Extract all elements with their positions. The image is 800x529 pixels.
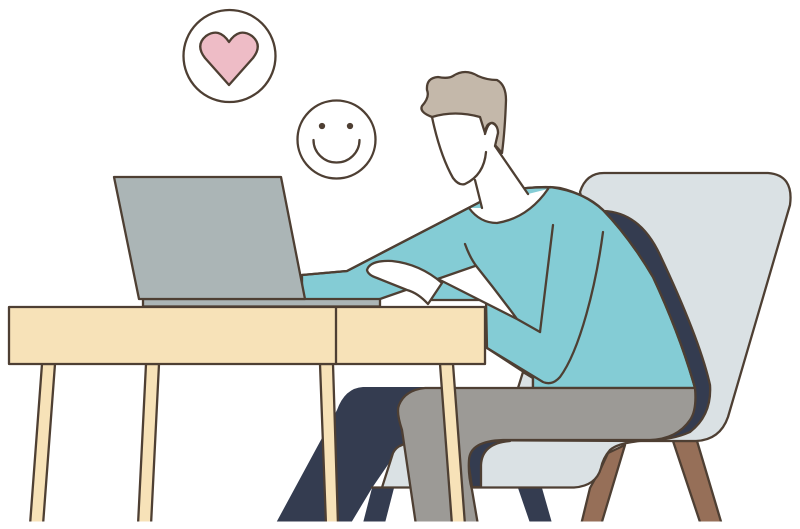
icon: smiley face <box>298 100 376 178</box>
chair back <box>580 173 791 441</box>
back cushion navy <box>603 211 710 440</box>
grey trousers <box>398 388 695 525</box>
navy trouser leg far <box>276 387 552 523</box>
desk top <box>9 307 485 364</box>
icon: heart bubble <box>184 10 276 102</box>
desk legs <box>30 364 465 525</box>
white wedge between arms <box>380 266 517 318</box>
sweater <box>302 187 695 388</box>
sweater fold lines <box>487 187 695 388</box>
face <box>494 146 495 147</box>
chair seat <box>372 440 640 488</box>
chair seat inner navy shadow <box>468 441 510 487</box>
neck and collar <box>469 146 550 223</box>
hand <box>367 261 442 304</box>
chair gap between arm and torso <box>518 372 533 388</box>
icon: heart <box>200 33 258 85</box>
chair legs <box>581 441 722 525</box>
laptop screen <box>114 177 305 299</box>
hair <box>421 72 506 153</box>
arm outline <box>302 203 478 275</box>
laptop base <box>143 299 380 306</box>
ear <box>491 124 497 146</box>
